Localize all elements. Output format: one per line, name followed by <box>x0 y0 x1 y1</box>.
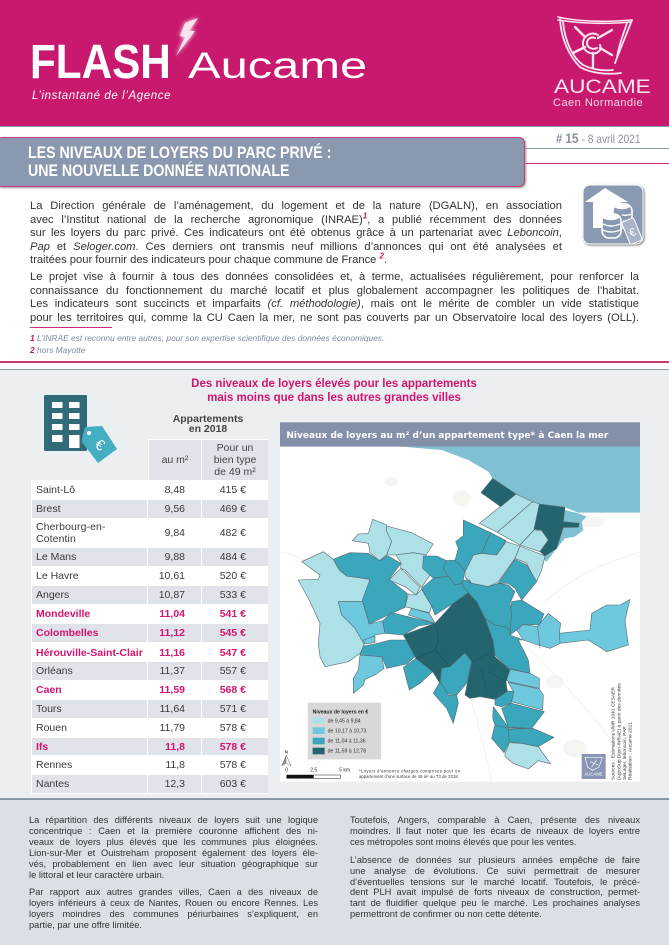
table body: 568 € <box>220 684 246 696</box>
table body: Cotentin <box>36 532 76 544</box>
table body <box>31 480 268 794</box>
small Aucame logo <box>582 754 606 779</box>
table caption: en 2018 <box>189 423 227 435</box>
brand title: Aucame: Aucame <box>188 45 367 86</box>
table body: 8,48 <box>165 484 185 496</box>
table: rents by city <box>31 439 268 794</box>
intro paragraph 1: traitées pour fournir des indicateurs pour chaque commune de France 2. <box>30 251 387 266</box>
analysis column 2: une analyse de évolutions. Ce suivi permettrait de mesurer <box>350 866 640 876</box>
table body: 533 € <box>220 589 246 601</box>
analysis column 2: ces métropoles sont moins élevés que pour les ventes. <box>350 837 576 847</box>
section heading <box>191 378 477 404</box>
analysis column 1: vés, probablement en lien avec leur situation géographique sur <box>29 859 318 869</box>
table body: 557 € <box>220 665 246 677</box>
table body: 571 € <box>220 703 246 715</box>
analysis column 1: le littoral et leur caractère urbain. <box>29 870 164 880</box>
intro paragraph 1: Pap et Seloger.com. Ces derniers ont transmis neuf millions d’annonces qui ont été analysées et <box>30 240 562 252</box>
analysis column 2: dent PLH avait impulsé de forts niveaux de construction, permet- <box>350 887 640 897</box>
table body: 11,8 <box>165 740 185 752</box>
table body: Le Mans <box>36 551 76 563</box>
table body: Brest <box>36 503 61 515</box>
icon: house and coins: € <box>628 226 638 240</box>
icon: house and coins <box>582 184 646 247</box>
icon: apartment building with price tag <box>44 395 117 463</box>
brand title: FLASH: FLASH <box>30 36 171 89</box>
legend: Niveaux de loyers en € <box>313 709 368 715</box>
footnotes: 2 hors Mayotte <box>30 345 85 355</box>
table body: Saint-Lô <box>36 484 75 496</box>
column: au m² <box>149 440 201 480</box>
table body: Colombelles <box>36 627 98 639</box>
header band <box>0 0 669 127</box>
table body: Rouen <box>36 722 67 734</box>
table body: 11,64 <box>160 703 185 715</box>
table body: Le Havre <box>36 570 79 582</box>
table body: Angers <box>36 589 69 601</box>
logo: Aucame shield <box>557 16 633 75</box>
analysis column 1 <box>29 815 318 930</box>
scale bar: 0 <box>285 767 288 773</box>
analysis column 1: loyers inférieurs à ceux de Nantes, Rouen ou encore Rennes. Les <box>29 898 318 908</box>
legend: de 9,45 à 9,84 <box>328 718 361 724</box>
icon: lightning bolt <box>174 16 200 56</box>
small Aucame logo: AUCAME <box>584 772 603 777</box>
analysis column 1: Lion-sur-Mer et Ouistreham proposent également des loyers éle- <box>29 848 318 858</box>
table body: Rennes <box>36 758 72 770</box>
intro paragraph 2: Le projet vise à fournir à tous des données consolidées et, à terme, actualisées régulièrement, pour renforcer la <box>30 271 639 283</box>
map header <box>280 422 640 447</box>
table body: 11,16 <box>159 646 185 658</box>
analysis column 2: d’éventuelles tensions sur le marché locatif. Toutefois, le précé- <box>350 877 640 887</box>
table body: 9,88 <box>165 551 185 563</box>
table body: 11,37 <box>160 665 185 677</box>
intro paragraph 1: La Direction générale de l’aménagement, du logement et de la nature (DGALN), en association <box>30 200 562 212</box>
analysis column 2: tant de fluidifier quelque peu le marché. Les prochaines analyses <box>350 898 640 908</box>
table body: 10,61 <box>159 570 185 582</box>
table body: 11,79 <box>160 722 185 734</box>
analysis column 1: loyers moindres des communes périurbaines s’expliquent, en <box>29 909 318 919</box>
column: au m²: au m² <box>162 454 188 466</box>
analysis column 1: concentrique : Caen et la première couronne affichent des ni- <box>29 826 318 836</box>
table body: 12,3 <box>165 778 185 790</box>
table body: 415 € <box>220 484 246 496</box>
legend: de 11,59 à 12,78 <box>328 749 366 755</box>
table body: 578 € <box>220 740 246 752</box>
legend: de 10,17 à 10,73 <box>328 728 367 734</box>
table body: 11,12 <box>159 627 185 639</box>
table caption <box>173 413 243 435</box>
table body: Ifs <box>36 740 48 752</box>
panel: analysis text <box>0 799 669 945</box>
map panel <box>280 422 640 782</box>
table body: 578 € <box>220 722 246 734</box>
table body: Hérouville-Saint-Clair <box>36 646 143 658</box>
intro paragraph 1: avec l’Institut national de la recherche agronomique (INRAE)1, a publié récemment des données <box>30 211 562 226</box>
map sources: SeLoger, leboncoin, PAP <box>622 726 628 780</box>
banner heading: LES NIVEAUX DE LOYERS DU PARC PRIVÉ : <box>28 144 331 162</box>
table body: 545 € <box>220 627 246 639</box>
table body: 547 € <box>220 646 246 658</box>
table body: 10,87 <box>159 589 185 601</box>
table body: Cherbourg-en- <box>36 520 106 532</box>
table body: Tours <box>36 703 62 715</box>
map sources: Sources : Estimations UMR 1041 CESAER <box>611 687 617 780</box>
logo text: Caen Normandie: Caen Normandie <box>553 97 643 109</box>
table body: 484 € <box>220 551 246 563</box>
panel: rent levels <box>0 369 669 799</box>
table body: 11,59 <box>159 684 185 696</box>
analysis column 1: La répartition des différents niveaux de loyers suit une logique <box>29 815 318 825</box>
map sources <box>611 683 634 780</box>
legend: de 11,04 à 11,36 <box>328 739 366 745</box>
analysis column 2: L’absence de données sur plusieurs années empêche de faire <box>350 855 640 865</box>
analysis column 1: veaux de loyers plus élevés que les communes plus éloignées. <box>29 837 318 847</box>
tagline: L’instantané de l’Agence <box>32 90 171 102</box>
column: bien type: bien type <box>214 454 256 466</box>
table body: Orléans <box>36 665 73 677</box>
table body: 9,56 <box>165 503 185 515</box>
column: bien type: Pour un <box>217 442 253 454</box>
table body: 11,04 <box>159 608 185 620</box>
column: bien type <box>202 440 268 480</box>
table body: 9,84 <box>165 526 185 538</box>
map sources: (AgroSup Dijon-INRAE) à partir des données <box>616 683 622 780</box>
icon: apartment building with price tag: € <box>92 436 108 455</box>
title banner <box>0 137 525 187</box>
table body: 578 € <box>220 758 246 770</box>
table body: 11,8 <box>165 758 185 770</box>
footnotes: 1 L’INRAE est reconnu entre autres, pour son expertise scientifique des données économiques. <box>30 333 384 343</box>
intro paragraph 1 <box>30 200 562 266</box>
map header: Niveaux de loyers au m² d’un appartement type* à Caen la mer <box>286 431 609 441</box>
map note <box>359 769 461 779</box>
banner heading <box>28 143 331 180</box>
table body: Nantes <box>36 778 69 790</box>
analysis column 2: moindres. Il faut noter que les écarts de niveaux de loyers entre <box>350 826 640 836</box>
table body: Mondeville <box>36 608 90 620</box>
section heading: mais moins que dans les autres grandes villes <box>207 392 461 404</box>
scale bar: 5 km <box>339 767 350 773</box>
scale bar <box>285 767 350 778</box>
footnotes <box>30 333 384 355</box>
banner heading: UNE NOUVELLE DONNÉE NATIONALE <box>28 162 289 180</box>
issue number and date: # 15 - 8 avril 2021 <box>556 130 641 146</box>
table body: 469 € <box>220 503 246 515</box>
north arrow: N <box>285 750 288 755</box>
choropleth communes <box>298 478 630 769</box>
map note: appartement d’une surface de 49 m² au T3 de 2018 <box>359 774 458 779</box>
logo text: AUCAME: AUCAME <box>554 77 651 98</box>
table body: 520 € <box>220 570 246 582</box>
intro paragraph 2: pour les territoires qui, comme la CU Caen la mer, ne sont pas couverts par un Observatoire local des loyers (OLL). <box>30 312 639 324</box>
table body: Caen <box>36 684 62 696</box>
analysis column 2: Toutefois, Angers, comparable à Caen, présente des niveaux <box>350 815 640 825</box>
scale bar: 2,5 <box>310 767 317 773</box>
table caption: Appartements <box>173 413 243 425</box>
intro paragraph 2 <box>30 271 639 324</box>
table body: 603 € <box>220 778 246 790</box>
map sources: Réalisation : Aucame 2021 <box>628 722 634 780</box>
analysis column 1: partie, par une offre limitée. <box>29 920 142 930</box>
column: bien type: de 49 m² <box>214 466 256 478</box>
intro paragraph 1: sur les loyers du parc privé. Ces indicateurs ont été obtenus grâce à un partenariat avec Leboncoin, <box>30 227 562 239</box>
table header <box>148 439 268 480</box>
analysis column 1: Par rapport aux autres grandes villes, Caen a des niveaux de <box>29 887 318 897</box>
intro paragraph 2: connaissance du fonctionnement du marché locatif et plus globalement accompagner les politiques de l’habitat. <box>30 285 639 297</box>
analysis column 2 <box>350 815 640 919</box>
analysis column 2: permettront de confirmer ou non cette détente. <box>350 909 542 919</box>
north arrow <box>282 750 291 766</box>
table body: 541 € <box>220 608 246 620</box>
legend <box>308 703 381 759</box>
section heading: Des niveaux de loyers élevés pour les appartements <box>191 378 477 390</box>
map note: *Loyers d’annonce charges comprises pour un <box>359 769 461 774</box>
intro paragraph 2: Les indicateurs sont succincts et imparfaits (cf. méthodologie), mais ont le mérite de combler un vide statistique <box>30 298 639 310</box>
table body: 482 € <box>220 526 246 538</box>
sea <box>402 447 640 562</box>
